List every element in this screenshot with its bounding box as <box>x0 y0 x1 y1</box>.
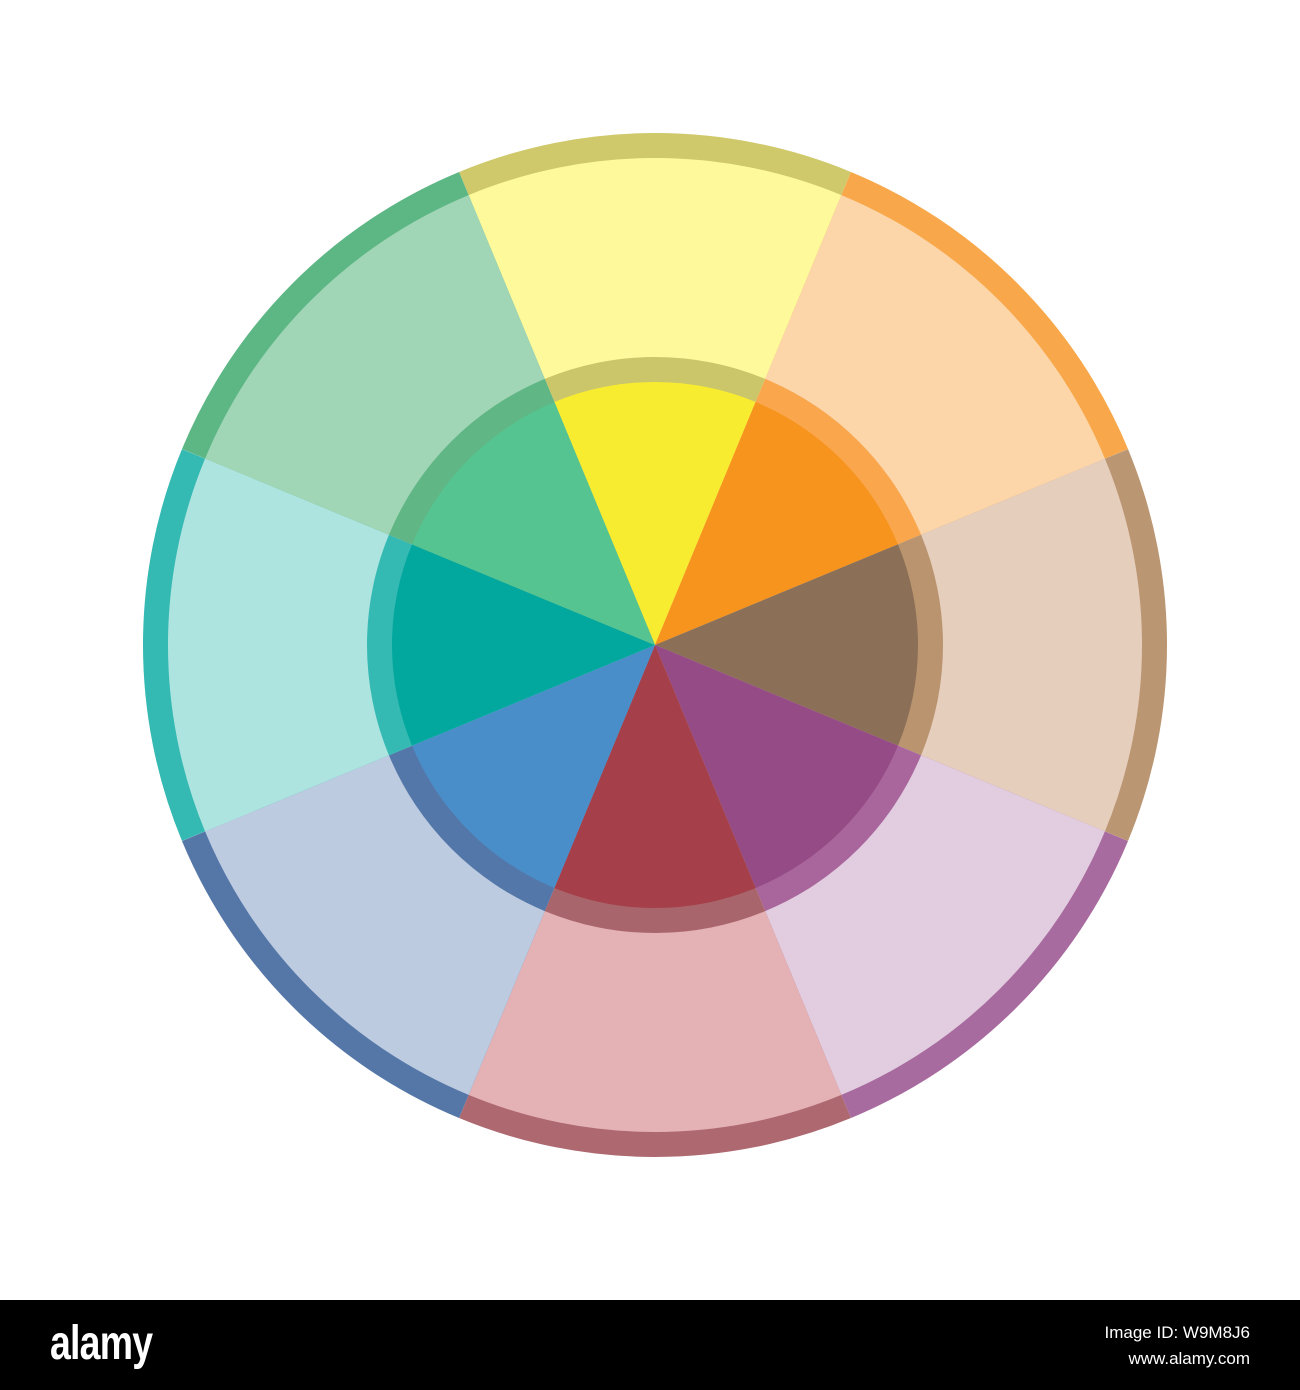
image id text <box>1104 1323 1250 1368</box>
segment: blue <box>154 506 794 1146</box>
segment: purple <box>516 506 1156 1146</box>
image id text: www.alamy.com <box>1128 1349 1250 1368</box>
segment: yellow <box>459 133 851 645</box>
logo text: alamy <box>50 1317 152 1370</box>
footer bar <box>0 1300 1300 1390</box>
image id text: Image ID: W9M8J6 <box>1104 1323 1250 1342</box>
segment: brown <box>655 449 1167 841</box>
segment: orange <box>516 144 1156 784</box>
segment: red <box>459 645 851 1157</box>
segment: green <box>154 144 794 784</box>
segment: teal <box>143 449 655 841</box>
